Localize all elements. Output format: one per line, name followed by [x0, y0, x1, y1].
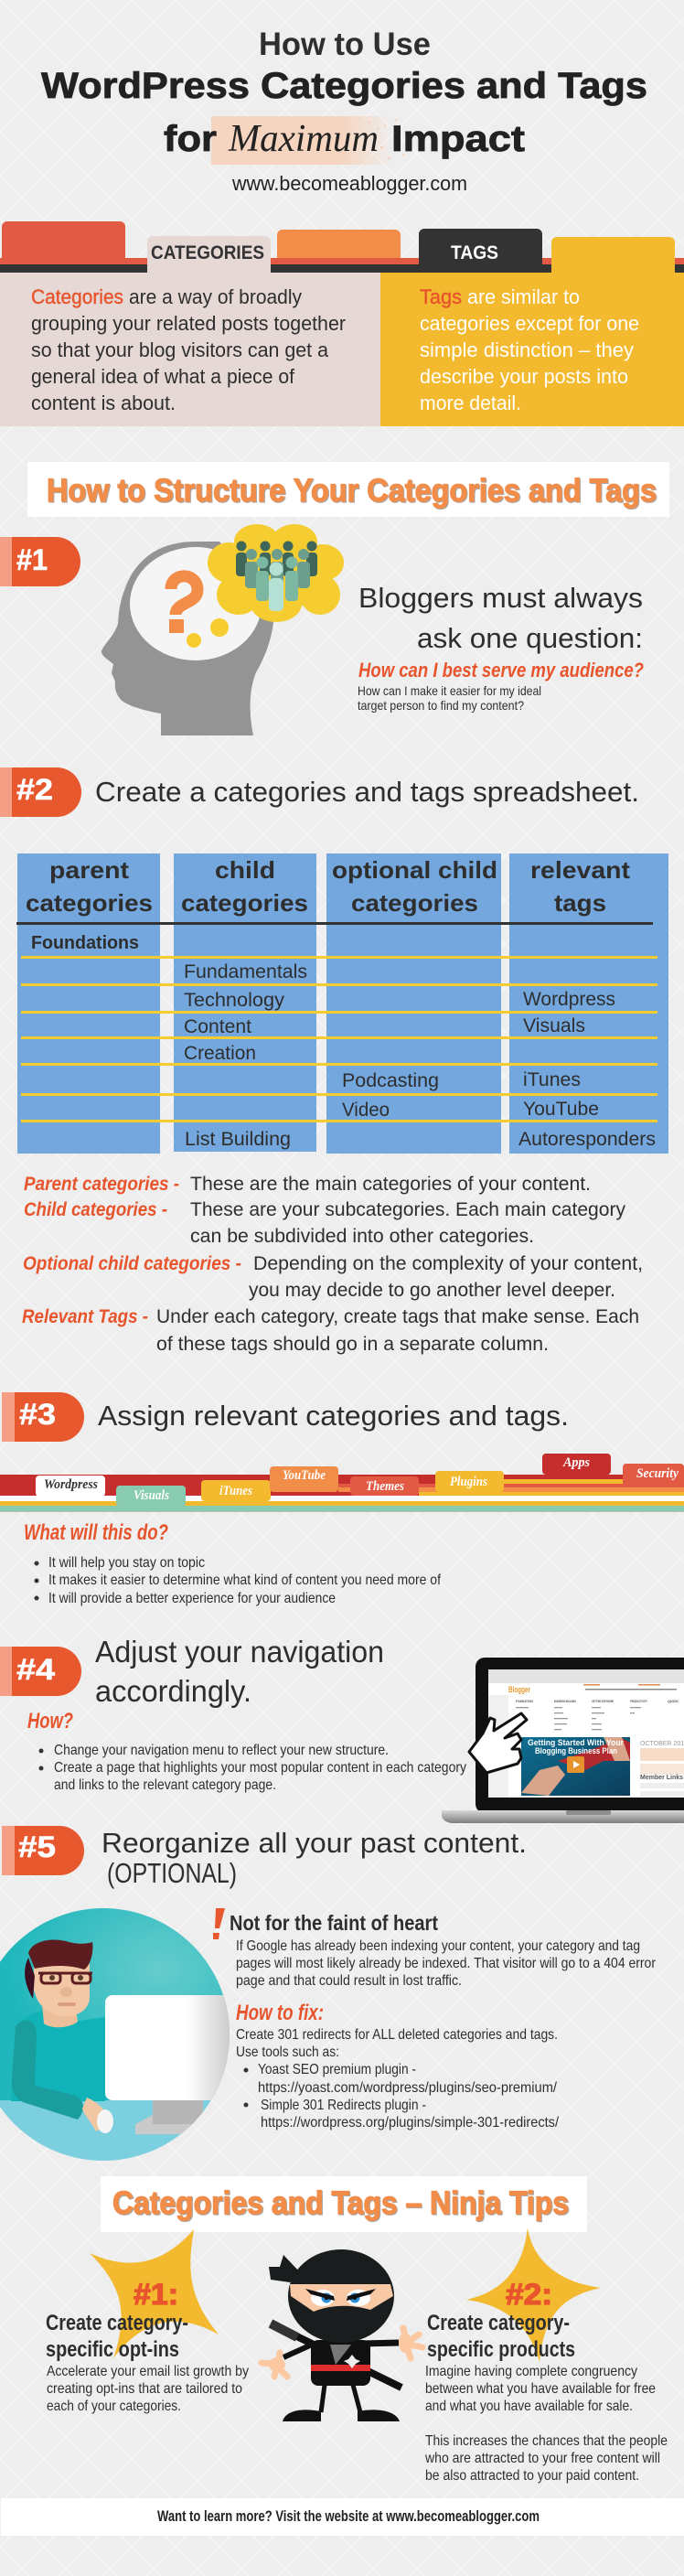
definitions legend: Parent categories -	[24, 1174, 179, 1195]
heading: assign: Assign relevant categories and tags.	[98, 1400, 569, 1432]
badge #4: #4	[16, 1653, 55, 1686]
spreadsheet table: Creation	[184, 1043, 256, 1064]
how list	[27, 1709, 466, 1793]
text: how to fix: Simple 301 Redirects plugin -	[261, 2098, 426, 2113]
folder tabs header	[0, 221, 684, 283]
laptop with website: Blogging Business Plan	[535, 1746, 617, 1756]
definitions legend: These are the main categories of your content.	[190, 1174, 591, 1195]
spreadsheet table: tags	[554, 889, 606, 917]
label #1: #1:	[134, 2278, 178, 2311]
ninja tip 2: Create category-	[427, 2311, 570, 2335]
ninja tip 2: specific products	[427, 2337, 575, 2362]
panel: tags: categories except for one	[420, 312, 639, 335]
badge #2: #2	[16, 773, 53, 806]
definitions legend: can be subdivided into other categories.	[190, 1226, 534, 1247]
title	[41, 27, 647, 165]
icon: head with audience thought	[102, 524, 344, 735]
ninja tip 1: specific opt-ins	[46, 2337, 179, 2362]
heading: ninja tips: Categories and Tags – Ninja Tips	[112, 2185, 569, 2221]
spreadsheet table: Fundamentals	[184, 961, 307, 982]
spreadsheet table: Podcasting	[342, 1070, 439, 1091]
ninja tip 2: Imagine having complete congruency	[425, 2364, 637, 2379]
panel: tags: more detail.	[420, 392, 521, 414]
heading: adjust navigation: Adjust your navigation	[95, 1635, 384, 1669]
badge #2	[0, 767, 81, 817]
spreadsheet table: child	[215, 856, 275, 884]
tab strip: Security	[636, 1466, 679, 1481]
icon: yellow star 1	[90, 2229, 219, 2358]
footer: Want to learn more? Visit the website at www.becomeablogger.com	[157, 2507, 540, 2525]
text: bloggers question	[358, 582, 644, 713]
badge #5	[2, 1826, 84, 1875]
definitions legend: These are your subcategories. Each main category	[190, 1199, 625, 1220]
definitions legend: Optional child categories -	[23, 1253, 241, 1274]
heading: reorganize	[102, 1827, 527, 1889]
badge #3: #3	[19, 1398, 56, 1431]
ninja tip 1: creating opt-ins that are tailored to	[47, 2381, 242, 2397]
text: bloggers question: Bloggers must always	[358, 582, 643, 614]
tab strip: Apps	[562, 1455, 590, 1470]
spreadsheet table: categories	[351, 889, 478, 917]
spreadsheet table: parent	[49, 856, 129, 884]
text: bloggers question: target person to find my content?	[358, 698, 524, 713]
panel: categories: so that your blog visitors can get a	[31, 338, 329, 361]
spreadsheet table: categories	[26, 889, 153, 917]
definitions legend: Under each category, create tags that make sense. Each	[156, 1306, 639, 1327]
panel: tags	[380, 273, 684, 426]
definitions legend: of these tags should go in a separate column.	[156, 1334, 549, 1355]
website url: www.becomeablogger.com	[231, 172, 467, 195]
text: not for the faint of heart: page and that could result in lost traffic.	[236, 1973, 462, 1989]
laptop with website: PRODUCTIVITY	[630, 1699, 647, 1703]
text: how to fix: Create 301 redirects for ALL deleted categories and tags.	[236, 2027, 558, 2043]
heading: spreadsheet: Create a categories and tags spreadsheet.	[95, 776, 639, 808]
folder tabs header: TAGS	[451, 242, 498, 263]
text: how to fix: https://yoast.com/wordpress/plugins/seo-premium/	[258, 2080, 558, 2096]
icon: exclamation mark	[213, 1908, 225, 1939]
heading: adjust navigation: accordingly.	[95, 1674, 251, 1708]
panel: categories: general idea of what a piece of	[31, 365, 295, 388]
tab strip: Themes	[366, 1479, 404, 1494]
definitions legend: Relevant Tags -	[22, 1306, 148, 1327]
laptop with website: Getting Started With Your	[528, 1738, 624, 1748]
laptop with website: FOUNDATIONS	[516, 1699, 533, 1703]
label #2: #2:	[506, 2278, 552, 2311]
footer	[1, 2498, 684, 2536]
icon: yellow star 2	[466, 2227, 601, 2362]
definitions legend: Child categories -	[24, 1199, 167, 1220]
badge #1	[0, 537, 80, 586]
spreadsheet table: Visuals	[523, 1015, 585, 1036]
tab strip: YouTube	[283, 1468, 326, 1483]
what will this do	[24, 1520, 441, 1606]
spreadsheet table: Wordpress	[523, 989, 615, 1010]
panel: categories: grouping your related posts together	[31, 312, 346, 335]
ninja tip 2: and what you have available for sale.	[425, 2399, 633, 2414]
ninja tip 1: each of your categories.	[47, 2399, 181, 2414]
folder tabs header: CATEGORIES	[151, 242, 264, 263]
text: bloggers question: How can I make it easier for my ideal	[358, 683, 541, 698]
badge #1: #1	[16, 543, 48, 576]
what will this do: It will help you stay on topic	[48, 1555, 205, 1571]
what will this do: It will provide a better experience for your audience	[48, 1591, 336, 1606]
tab strip: Plugins	[450, 1475, 487, 1489]
title: Maximum	[228, 118, 379, 160]
spreadsheet table: relevant	[530, 856, 630, 884]
how list: How?	[27, 1709, 73, 1733]
ninja tip 2	[424, 2311, 668, 2484]
tab strip: Visuals	[134, 1488, 169, 1503]
definitions legend: Depending on the complexity of your content,	[253, 1253, 643, 1274]
heading: reorganize: Reorganize all your past content.	[102, 1827, 527, 1859]
spreadsheet table: List Building	[185, 1129, 291, 1150]
ninja tip 1: Accelerate your email list growth by	[47, 2364, 249, 2379]
ninja tip 1	[46, 2311, 249, 2414]
panel: tags: are similar to	[467, 285, 580, 308]
icon: pointing hand	[469, 1713, 527, 1773]
heading: adjust navigation	[95, 1635, 384, 1708]
definitions legend: you may decide to go another level deeper.	[249, 1280, 615, 1301]
tab strip	[0, 1454, 684, 1512]
heading: reorganize: (OPTIONAL)	[107, 1857, 237, 1889]
spreadsheet table: Foundations	[31, 933, 139, 953]
spreadsheet table: Technology	[184, 990, 285, 1011]
definitions legend	[22, 1174, 643, 1355]
text: how to fix: Use tools such as:	[236, 2045, 339, 2060]
ninja tip 1: Create category-	[46, 2311, 188, 2335]
text: not for the faint of heart	[230, 1911, 657, 1989]
ninja tip 2: be also attracted to your paid content.	[425, 2468, 639, 2484]
ninja character	[262, 2249, 422, 2421]
spreadsheet table: Video	[342, 1100, 390, 1121]
panel: categories: content is about.	[31, 392, 176, 414]
how list: Change your navigation menu to reflect your new structure.	[54, 1743, 389, 1758]
panel: categories: Categories	[31, 285, 123, 308]
laptop with website	[442, 1658, 684, 1823]
panel: tags: simple distinction – they	[420, 338, 634, 361]
panel: tags: Tags	[420, 285, 462, 308]
panel: categories: are a way of broadly	[129, 285, 302, 308]
spreadsheet table: iTunes	[523, 1069, 581, 1090]
heading: how to structure	[27, 462, 669, 517]
ninja tip 2: between what you have available for free	[425, 2381, 656, 2397]
title: for	[164, 119, 217, 159]
text: how to fix: Yoast SEO premium plugin -	[258, 2062, 416, 2077]
title: How to Use	[259, 27, 431, 62]
text: how to fix: https://wordpress.org/plugins/simple-301-redirects/	[261, 2115, 560, 2131]
text: not for the faint of heart: Not for the faint of heart	[230, 1911, 438, 1935]
badge #4	[0, 1647, 81, 1696]
spreadsheet table: Content	[184, 1016, 251, 1037]
heading: ninja tips	[101, 2176, 587, 2232]
spreadsheet table: optional child	[332, 856, 497, 884]
laptop with website: QUICK	[668, 1699, 679, 1703]
badge #3	[2, 1392, 84, 1442]
tab strip: Wordpress	[44, 1477, 98, 1492]
laptop with website: Blogger	[508, 1685, 530, 1694]
laptop with website: Member Links	[640, 1775, 683, 1781]
title: Impact	[391, 119, 525, 159]
spreadsheet table: YouTube	[523, 1099, 599, 1120]
text: how to fix: How to fix:	[236, 2001, 324, 2025]
spreadsheet table	[16, 853, 668, 1154]
panel: tags: describe your posts into	[420, 365, 628, 388]
what will this do: It makes it easier to determine what kind of content you need more of	[48, 1572, 441, 1588]
spreadsheet table: categories	[181, 889, 308, 917]
laptop with website: BUSINESS BUILDING	[554, 1699, 576, 1703]
title: WordPress Categories and Tags	[41, 66, 647, 106]
how list: Create a page that highlights your most popular content in each category	[54, 1760, 466, 1776]
panel: categories	[0, 273, 380, 426]
tab strip: iTunes	[219, 1484, 252, 1498]
text: how to fix	[236, 2001, 560, 2131]
laptop with website: GETTING EXPOSURE	[592, 1699, 614, 1703]
illustration: man at computer	[0, 1908, 242, 2164]
badge #5: #5	[18, 1830, 56, 1863]
text: bloggers question: ask one question:	[417, 622, 643, 654]
how list: and links to the relevant category page.	[54, 1777, 276, 1793]
what will this do: What will this do?	[24, 1520, 168, 1545]
spreadsheet table: Autoresponders	[518, 1129, 656, 1150]
